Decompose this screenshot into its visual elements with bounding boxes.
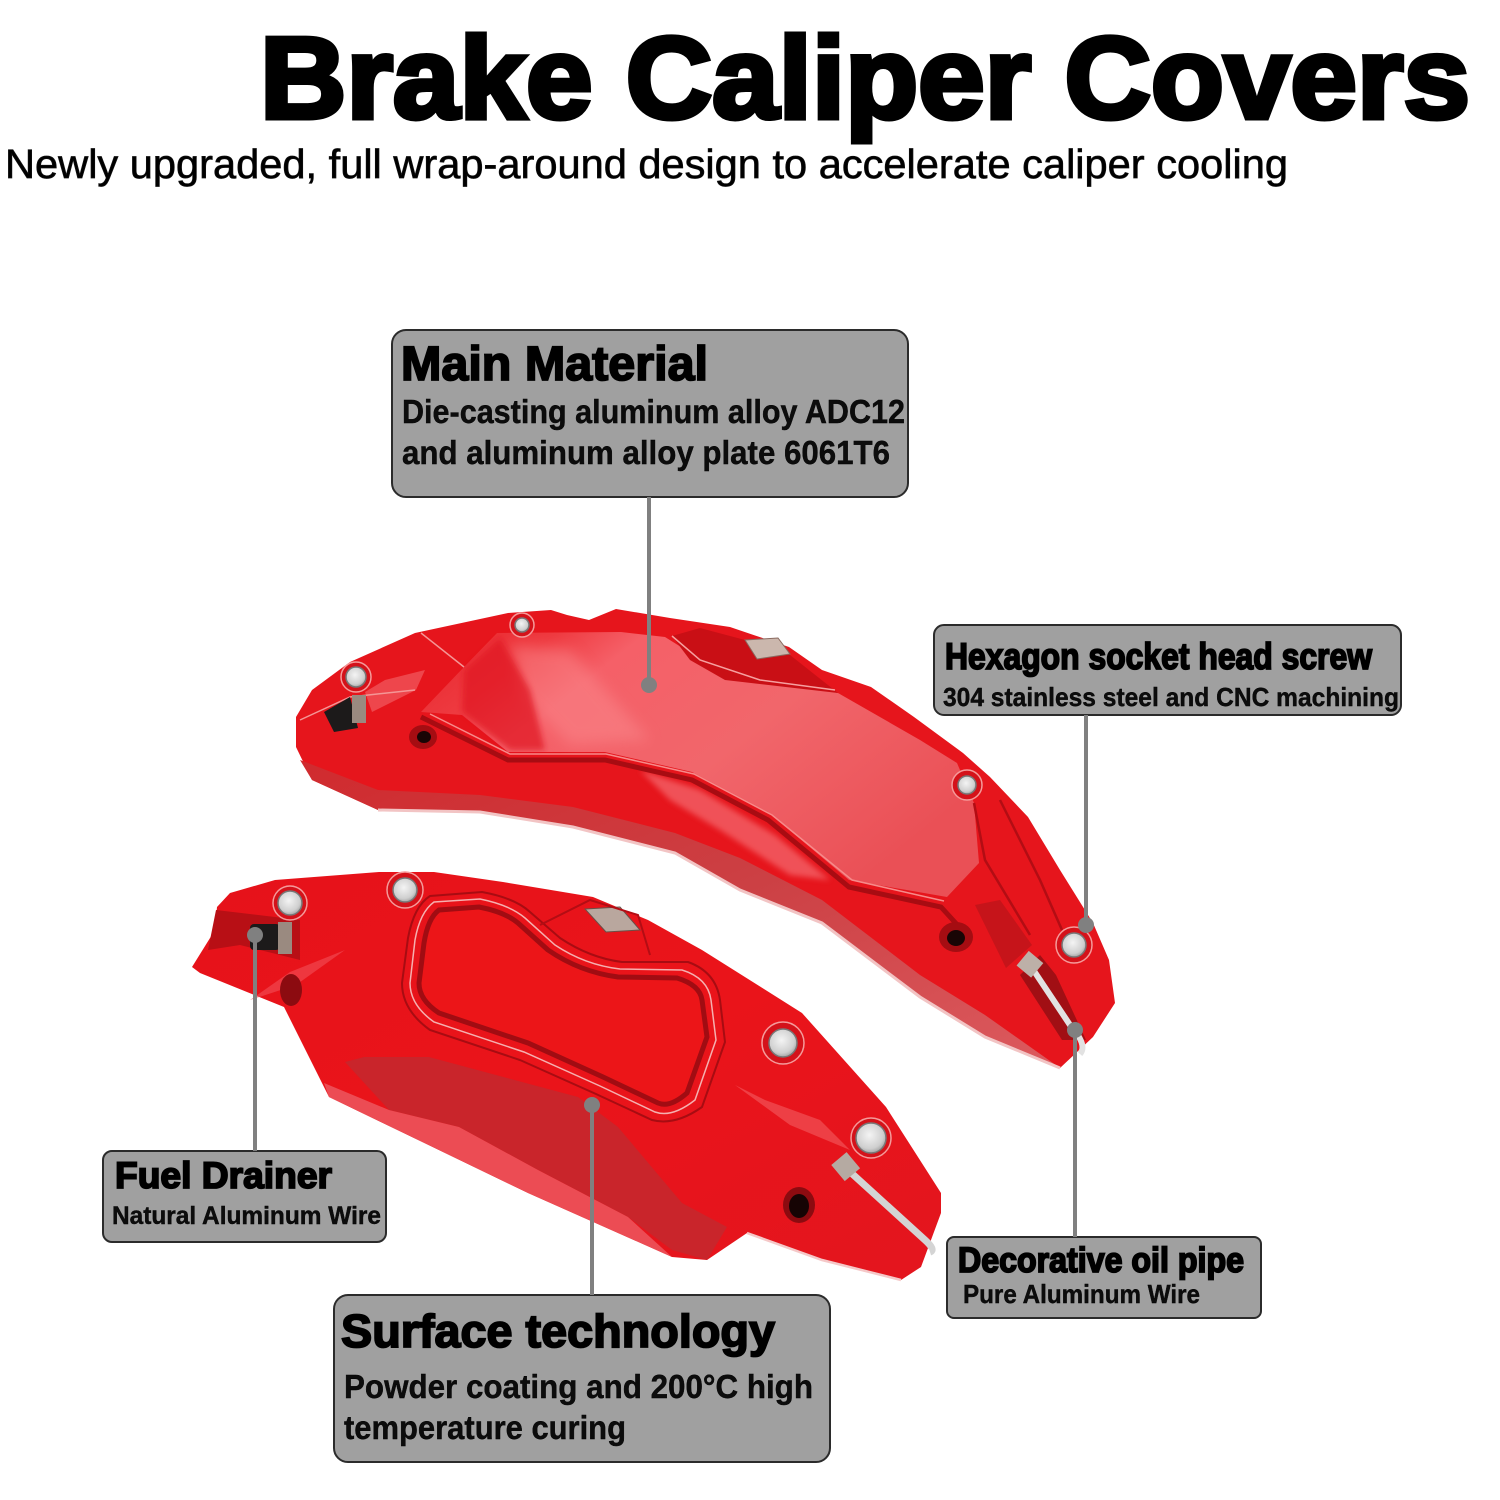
lower caliper body	[192, 872, 941, 1280]
leader: main material	[641, 497, 657, 693]
lower caliper tail white edge	[747, 1233, 901, 1280]
upper caliper red highlights	[510, 645, 650, 745]
callout: surface technology	[334, 1295, 830, 1462]
callout: main material: and aluminum alloy plate 6061T6	[402, 434, 890, 471]
lower caliper left pocket and ridges	[208, 910, 300, 960]
callout: fuel drainer	[103, 1151, 386, 1242]
upper oil pipe and slot	[1017, 951, 1086, 1054]
callout: fuel drainer: Natural Aluminum Wire	[112, 1202, 381, 1230]
subtitle: Newly upgraded, full wrap-around design to accelerate caliper cooling	[5, 141, 1288, 187]
callout: fuel drainer: Fuel Drainer	[115, 1155, 332, 1196]
upper caliper highlight below groove	[640, 770, 830, 880]
lower oil pipe	[831, 1152, 932, 1252]
upper bolts	[341, 662, 371, 692]
callout: hexagon socket head screw	[934, 625, 1401, 715]
upper caliper diamond badge	[745, 638, 790, 659]
lower caliper recessed pocket	[402, 892, 725, 1121]
leader: decorative oil pipe	[1067, 1022, 1083, 1237]
upper caliper groove line	[421, 717, 962, 930]
callout: main material: Die-casting aluminum alloy ADC12	[402, 393, 905, 430]
callout: hexagon socket head screw: Hexagon socket head screw	[945, 636, 1372, 677]
upper holes	[409, 725, 437, 749]
upper caliper shaded lower band	[300, 760, 1060, 1068]
title: Brake Caliper Covers	[260, 13, 1470, 143]
lower caliper diamond badge	[585, 907, 640, 932]
upper caliper top ridge	[672, 628, 838, 693]
leader: fuel drainer	[247, 927, 263, 1151]
upper caliper left end ridges	[365, 670, 425, 712]
lower black drain plug	[250, 922, 292, 954]
lower caliper light lower stripe	[324, 1083, 672, 1257]
upper caliper tail ridge lines	[974, 800, 1062, 935]
upper caliper body	[296, 609, 1115, 1068]
callout: main material: Main Material	[401, 338, 708, 391]
upper caliper pale bottom edge	[378, 810, 1060, 1068]
lower holes	[280, 974, 302, 1006]
callout: hexagon socket head screw: 304 stainless steel and CNC machining	[943, 682, 1399, 712]
callout: decorative oil pipe: Decorative oil pipe	[958, 1241, 1244, 1280]
upper black drain plug	[324, 695, 366, 732]
leader: surface technology	[584, 1097, 600, 1295]
callout: decorative oil pipe	[947, 1237, 1261, 1318]
callout: surface technology: Powder coating and 200°C high	[344, 1368, 813, 1405]
lower caliper dark side band	[345, 1057, 727, 1260]
callout: decorative oil pipe: Pure Aluminum Wire	[963, 1279, 1200, 1309]
lower brake caliper cover	[192, 872, 941, 1280]
leader: hexagon screw	[1078, 715, 1094, 933]
lower caliper tail highlight	[735, 1085, 850, 1150]
upper brake caliper cover	[296, 609, 1115, 1068]
callout: surface technology: temperature curing	[344, 1409, 626, 1446]
upper caliper main panel	[421, 632, 979, 897]
callout: main material	[392, 330, 908, 497]
lower bolts	[273, 886, 307, 920]
callout: surface technology: Surface technology	[341, 1305, 775, 1357]
